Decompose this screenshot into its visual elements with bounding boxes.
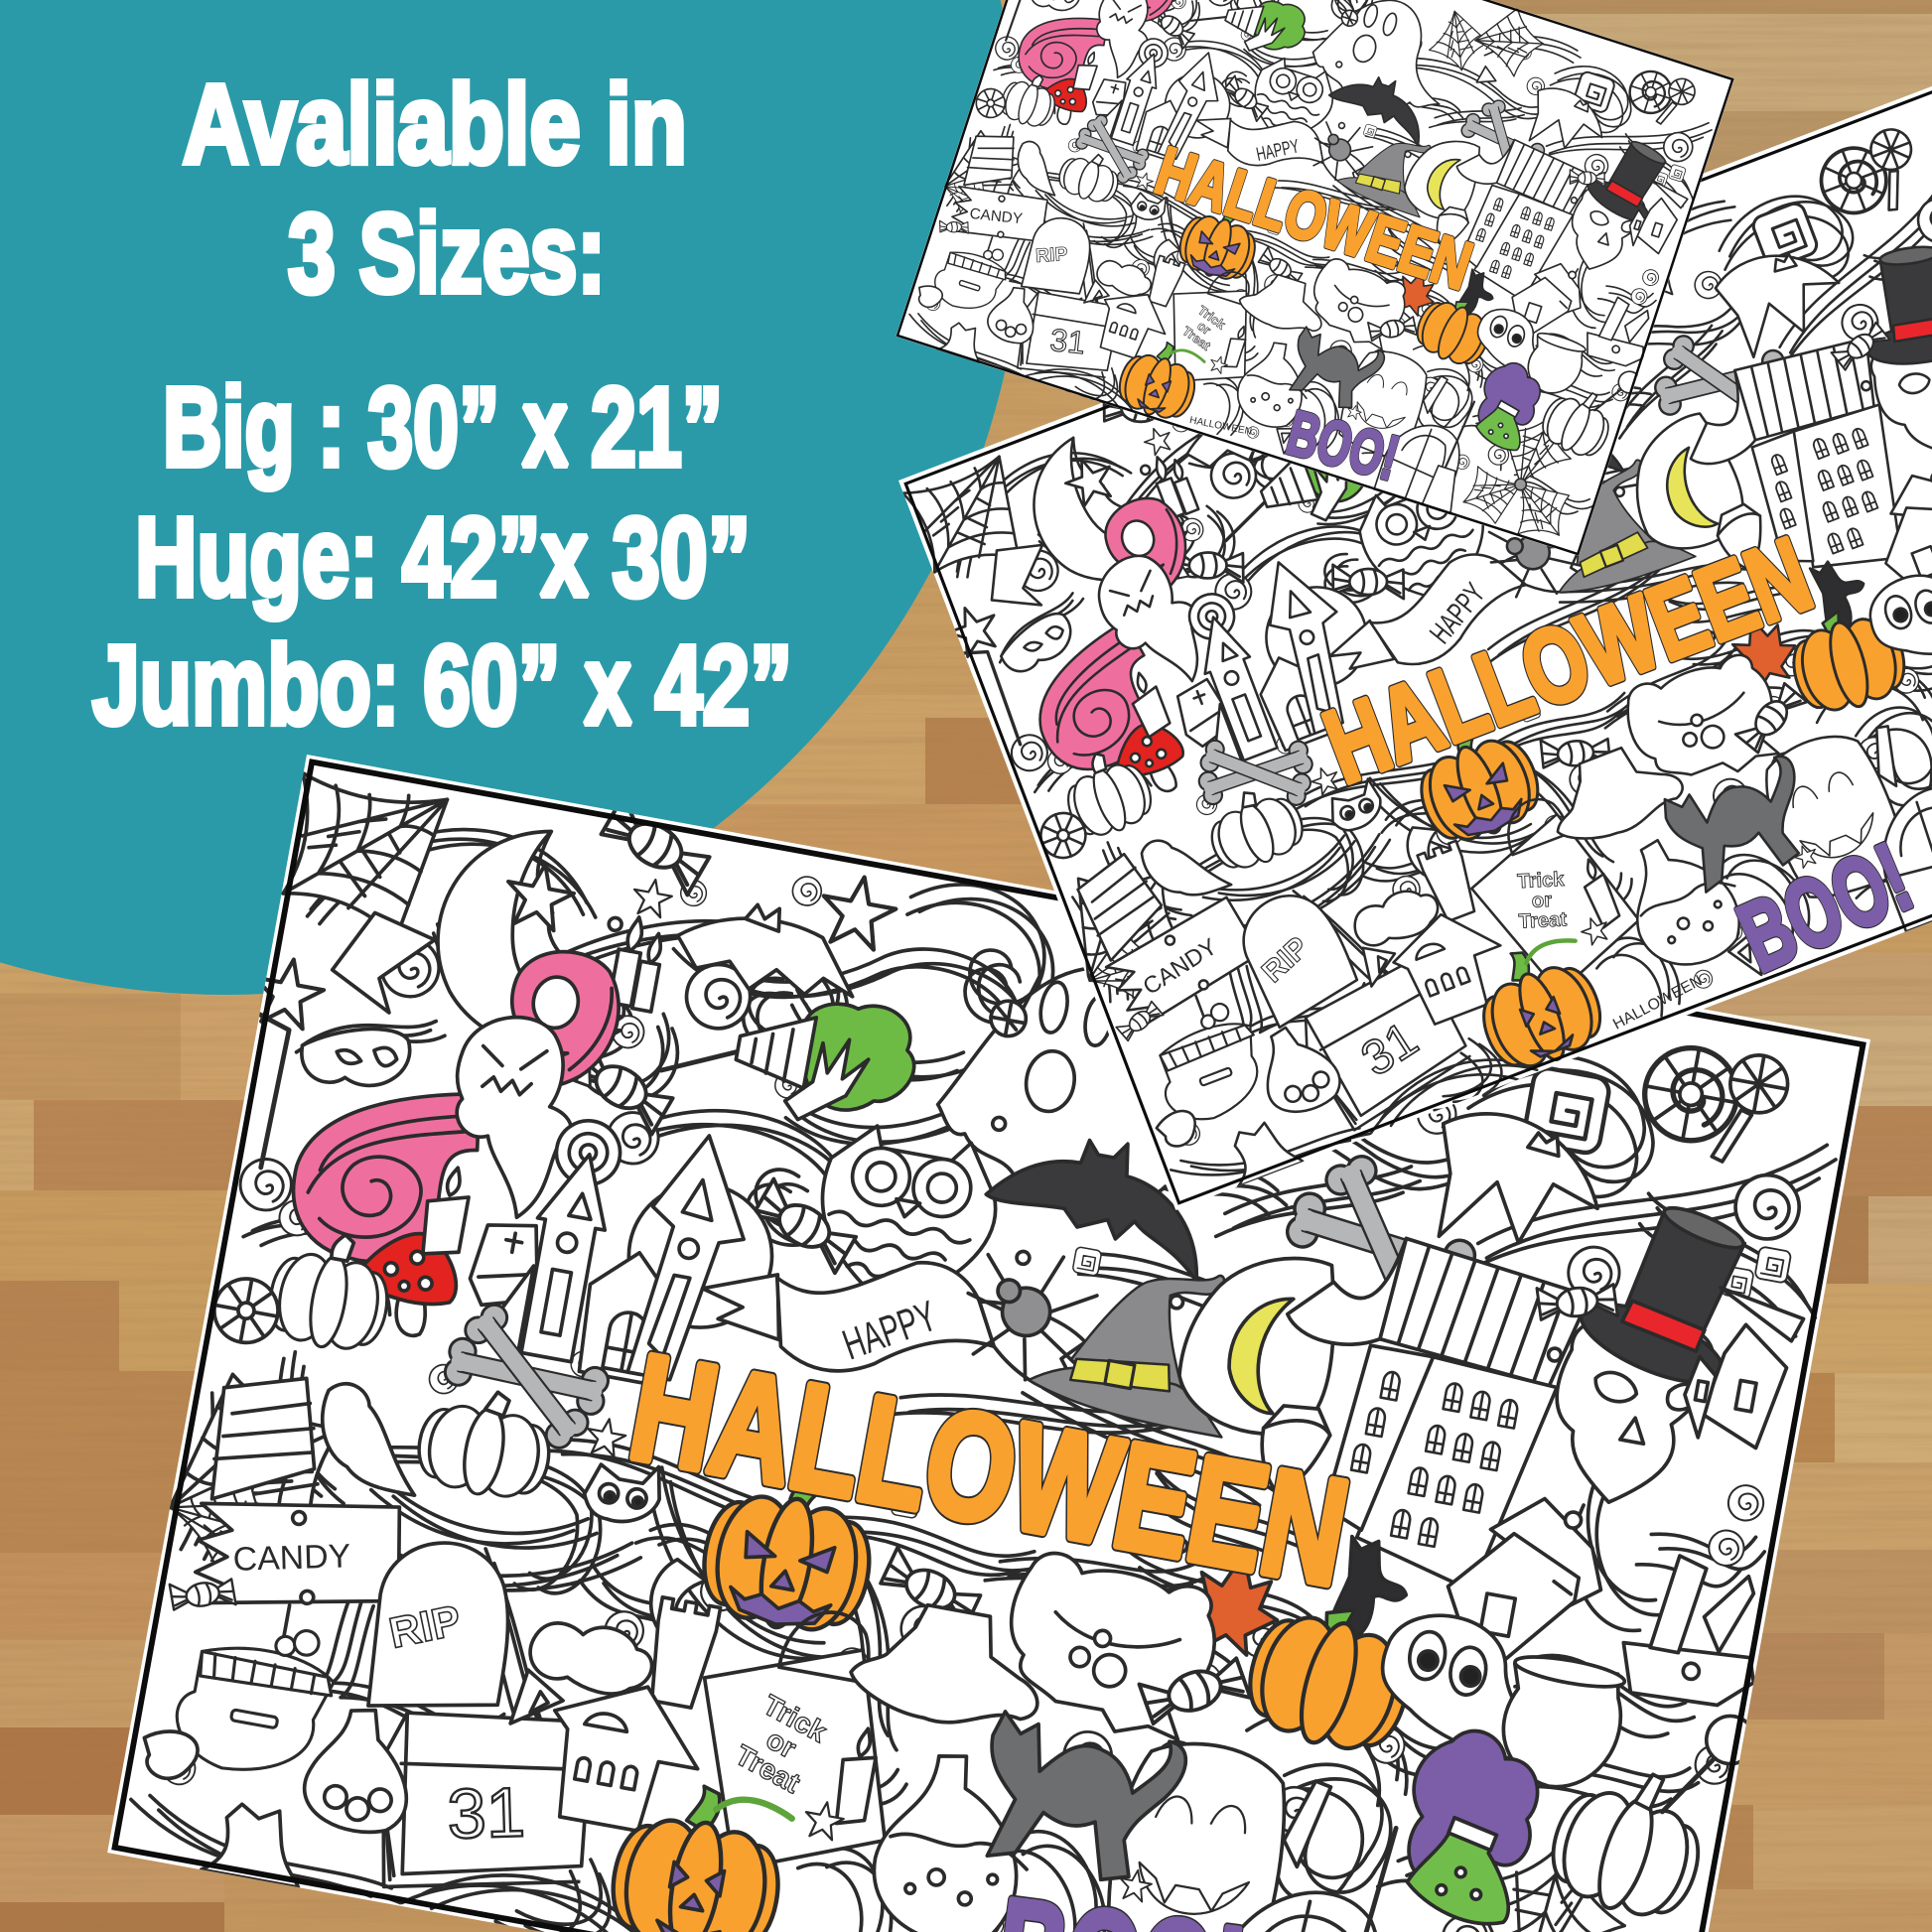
HALLOWEEN title [620, 1322, 1359, 1616]
jug and yellow moon [1171, 1240, 1348, 1445]
Trick or Treat: Treat [1518, 908, 1568, 933]
sign CANDY board [174, 1472, 415, 1695]
white pumpkin and wheel [209, 1214, 398, 1367]
BOO [989, 1868, 1253, 1932]
small houses [1678, 1285, 1806, 1452]
background swirl bands [113, 765, 1864, 1932]
31: 31 [1048, 322, 1087, 360]
small HALLOWEEN banner: HALLOWEEN [1188, 415, 1253, 438]
Trick or Treat: Trick [758, 1689, 832, 1749]
BOO [1280, 397, 1406, 493]
RIP: RIP [1035, 243, 1068, 267]
black frame [115, 761, 1863, 1932]
calendar [360, 1687, 607, 1921]
artwork text [172, 1177, 1374, 1932]
cloud and castle [525, 1576, 721, 1711]
31: 31 [1352, 1012, 1428, 1087]
city buildings [1300, 1342, 1636, 1700]
striped awning [1283, 1220, 1593, 1390]
HAPPY: HAPPY [1424, 578, 1492, 650]
church and towers [485, 1103, 792, 1402]
Trick or Treat: Trick [1517, 869, 1566, 893]
RIP: RIP [1256, 931, 1315, 989]
HAPPY: HAPPY [837, 1293, 943, 1369]
black frame [905, 89, 1932, 1203]
bones [434, 996, 1491, 1609]
HAPPY: HAPPY [1254, 135, 1301, 166]
31: 31 [446, 1772, 526, 1854]
top right pumpkin flower and candy [1411, 1002, 1792, 1362]
frog [995, 1547, 1226, 1746]
eye ghost and cauldron right [1366, 1507, 1773, 1819]
moon and stars [183, 773, 900, 1489]
Trick or Treat: Treat [1179, 323, 1214, 353]
Trick or Treat: Treat [730, 1739, 805, 1800]
candy top, candles, small bat [569, 793, 881, 1046]
green hand and broom [553, 952, 924, 1178]
heading: available in: Avaliable in [183, 62, 687, 187]
spiral fillers [123, 786, 1861, 1932]
trick or treat bag [672, 1591, 923, 1895]
misc lower shapes [432, 916, 1656, 1932]
HALLOWEEN title [1147, 134, 1480, 304]
big ghost and lollipop [926, 941, 1265, 1221]
black bat [978, 1121, 1218, 1282]
HALLOWEEN title [1311, 515, 1826, 806]
Trick or Treat [1179, 302, 1229, 353]
boot shape [845, 1593, 1051, 1738]
jack-o-lantern [694, 1454, 885, 1642]
pink ribbon and ghost [266, 907, 628, 1299]
size: huge: Huge: 42”x 30” [135, 494, 751, 620]
poster: small, top [886, 0, 1741, 572]
orange pumpkin [1234, 1592, 1425, 1766]
potion bottle and cat sketch [120, 1564, 441, 1904]
maple leaf [1179, 1546, 1288, 1659]
Trick or Treat: Trick [1195, 303, 1229, 333]
CANDY: CANDY [969, 206, 1024, 227]
doodle artwork [89, 737, 1884, 1932]
Trick or Treat: or [760, 1724, 801, 1765]
candy mid [862, 1545, 1266, 1747]
RIP: RIP [385, 1596, 465, 1658]
window [1202, 1876, 1393, 1932]
candle [832, 1725, 881, 1828]
poster: medium, right [887, 69, 1932, 1236]
haunted house [536, 1671, 711, 1840]
pumpkin ghost [1096, 1731, 1334, 1932]
CANDY: CANDY [1139, 934, 1222, 1001]
webs [96, 747, 1828, 1932]
artwork text [1047, 464, 1932, 1200]
size: jumbo: Jumbo: 60” x 42” [92, 622, 792, 748]
mushroom and candle [345, 1084, 625, 1367]
HALLOWEEN title: HALLOWEEN [1147, 134, 1480, 304]
HALLOWEEN title: HALLOWEEN [620, 1322, 1359, 1616]
acorn [1253, 1400, 1334, 1498]
bottom jack-o-lantern [604, 1773, 795, 1932]
doodle artwork copy [887, 69, 1932, 1236]
crow, cat eyes and white pumpkin in centre left [193, 1344, 733, 1651]
size: big: Big : 30” x 21” [163, 364, 723, 489]
spider [955, 1241, 1103, 1390]
broom and flask [1311, 1713, 1547, 1932]
CANDY: CANDY [232, 1538, 351, 1579]
BOO: BOO! [1280, 397, 1406, 493]
Trick or Treat: or [1194, 318, 1214, 338]
HALLOWEEN title: HALLOWEEN [620, 1322, 1359, 1616]
grey cat [971, 1711, 1189, 1891]
top hat and skull [1539, 1187, 1757, 1519]
small HALLOWEEN banner: HALLOWEEN [1610, 972, 1705, 1034]
doodle artwork copy [886, 0, 1741, 572]
BOO: BOO! [1280, 397, 1406, 493]
black cat [1325, 1535, 1415, 1658]
headline and size list [92, 62, 792, 748]
witch hat [1025, 1245, 1250, 1438]
teal circle panel [0, 0, 1025, 995]
Trick or Treat [1516, 869, 1568, 933]
white pumpkin right and lollipop [1536, 1688, 1758, 1932]
Trick or Treat: or [1531, 890, 1553, 912]
artwork text [923, 48, 1491, 501]
owl [739, 1106, 1007, 1322]
gravestone [360, 1532, 524, 1728]
Trick or Treat [730, 1689, 832, 1800]
cauldron left [169, 1610, 342, 1785]
banner [692, 1224, 1100, 1416]
poster: large, bottom left [89, 737, 1884, 1932]
HALLOWEEN title: HALLOWEEN [1147, 134, 1480, 304]
round flask [863, 1743, 1044, 1932]
heading: 3 sizes: 3 Sizes: [288, 191, 606, 316]
black frame [897, 0, 1732, 554]
